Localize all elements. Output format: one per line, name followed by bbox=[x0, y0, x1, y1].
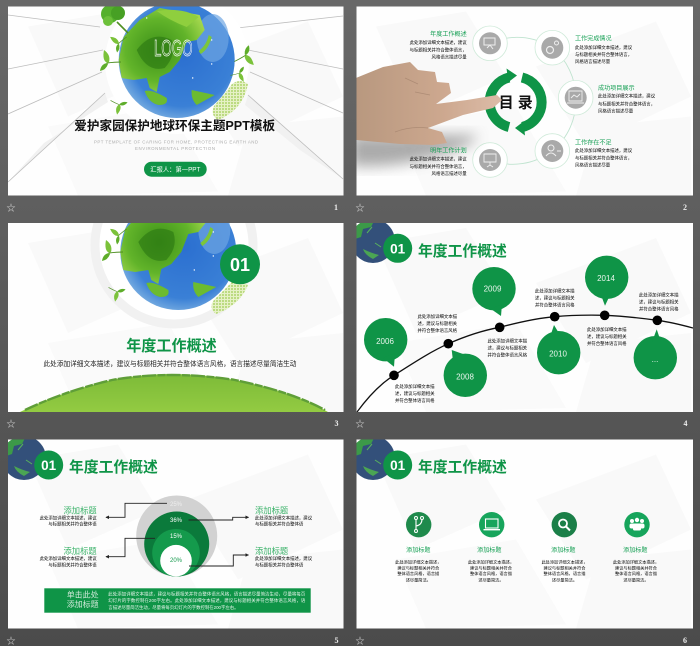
note 2014: 并符合整体语言风格 bbox=[587, 340, 627, 347]
label top right bbox=[255, 505, 313, 528]
label bottom left: 与标题相关并符合整体语 bbox=[48, 561, 97, 568]
star and number, slide 3: ☆ bbox=[6, 419, 16, 429]
item 3: 建议与标题相关并符合 bbox=[544, 564, 586, 571]
star and number, slide 3: 3 bbox=[334, 419, 338, 428]
corner earth bbox=[2, 436, 46, 480]
item 1: 述尽量简洁。 bbox=[406, 577, 431, 584]
section heading: 年度工作概述 bbox=[126, 337, 217, 355]
bubble ellipsis: ... bbox=[652, 355, 658, 364]
contents heading: 目 录 bbox=[499, 94, 533, 112]
bubble 2008 bbox=[444, 350, 487, 397]
item 2: 添加标题 bbox=[477, 546, 501, 554]
timeline dots bbox=[389, 310, 662, 380]
sprouts bbox=[102, 228, 127, 302]
label top right: 添加标题 bbox=[255, 505, 288, 515]
note 2009: 并符合整体语言风格 bbox=[488, 352, 528, 358]
icon: branch bbox=[406, 512, 431, 537]
item 2 bbox=[468, 546, 514, 584]
label: annual overview bbox=[410, 30, 467, 61]
star and number, slide 1 bbox=[6, 203, 338, 213]
note 2006: 此处添加详细文本描 bbox=[395, 383, 435, 390]
panel: slide 3 section cover bbox=[8, 223, 344, 412]
star and number, slide 5: 5 bbox=[334, 636, 338, 645]
star and number, slide 4 bbox=[355, 419, 688, 429]
section description: 此处添加详细文本描述，建议与标题相关并符合整体语言风格，语言描述尽量简洁生动 bbox=[44, 359, 297, 368]
bubble 2008: 2008 bbox=[456, 372, 474, 382]
illustration: watercolor earth bbox=[119, 2, 235, 118]
star and number, slide 3 bbox=[6, 419, 338, 429]
item 4: 此处添加详细文本描述， bbox=[613, 558, 659, 565]
label: work completion bbox=[575, 35, 633, 65]
badge: 01 bbox=[390, 242, 406, 256]
label: next year plan: 此处添加详细文本描述，建议 bbox=[410, 156, 467, 163]
slide title: 年度工作概述 bbox=[418, 242, 507, 260]
bubble 2009: 2009 bbox=[484, 284, 502, 294]
label top left: 添加标题 bbox=[63, 505, 97, 515]
badge bbox=[383, 234, 412, 263]
star and number, slide 6: 6 bbox=[683, 636, 687, 645]
note 2006: 述，建议与标题相关 bbox=[395, 390, 435, 397]
label: next year plan: 明年工作计划 bbox=[430, 147, 467, 155]
node 2 bbox=[535, 30, 570, 65]
label bottom right: 此处添加详细文本描述，建议 bbox=[255, 555, 313, 562]
label: next year plan: 风格语言描述尽量 bbox=[432, 170, 467, 177]
nested circle chart: 36% bbox=[170, 518, 183, 524]
pale green tree bbox=[213, 81, 248, 120]
note 2008 bbox=[418, 313, 458, 334]
label top right: 此处添加详细文本描述，建议 bbox=[255, 514, 313, 521]
node 1 bbox=[473, 26, 507, 61]
note 2008: 并符合整体语言风格 bbox=[418, 327, 458, 334]
timeline curve bbox=[357, 315, 693, 412]
note 2006 bbox=[395, 383, 435, 404]
grass hill bbox=[20, 374, 328, 412]
label: shortcomings: 与标题相关并符合整体语言， bbox=[575, 154, 632, 161]
item 3: 整体语言风格，语言描 bbox=[544, 570, 585, 577]
label: annual overview: 风格语言描述尽量 bbox=[432, 54, 467, 61]
pale green tree bbox=[211, 281, 248, 314]
illustration: earth bbox=[120, 223, 236, 310]
section number badge bbox=[220, 244, 260, 284]
star and number, slide 6: ☆ bbox=[355, 636, 365, 646]
green summary band: 言描述尽量简洁生动，尽量将每页幻灯片的字数控制在200字左右。 bbox=[108, 604, 239, 611]
green summary band: 添加标题 bbox=[67, 599, 99, 609]
label: next year plan bbox=[410, 147, 467, 177]
cover subtitle: ENVIRONMENTAL PROTECTION bbox=[135, 146, 215, 151]
note last bbox=[639, 292, 679, 312]
label top left bbox=[40, 505, 97, 528]
radiating lines bbox=[8, 15, 343, 182]
label bottom right: 与标题相关并符合整体语 bbox=[255, 561, 304, 568]
bubble ellipsis bbox=[634, 329, 677, 379]
label: project results: 与标题相关并符合整体语言， bbox=[598, 100, 655, 107]
cover subtitle: PPT TEMPLATE OF CARING FOR HOME, PROTECTING EARTH AND bbox=[94, 140, 258, 144]
tree bbox=[101, 5, 128, 33]
hand pointing bbox=[356, 62, 502, 145]
note 2009: 此处添加详细文本描 bbox=[488, 338, 528, 344]
item 4: 建议与标题相关并符合 bbox=[615, 564, 658, 571]
badge bbox=[34, 450, 63, 480]
note 2010: 此处添加详细文本描 bbox=[535, 288, 575, 294]
star and number, slide 2: 2 bbox=[683, 203, 687, 212]
white halo behind globe bbox=[237, 27, 240, 28]
badge: 01 bbox=[390, 458, 406, 473]
label bottom right: 添加标题 bbox=[255, 546, 288, 556]
note 2009: 述，建议与标题相关 bbox=[488, 344, 528, 352]
star and number, slide 1: 1 bbox=[334, 203, 338, 212]
star and number, slide 6 bbox=[355, 636, 687, 646]
cover subtitle bbox=[94, 140, 258, 150]
nested circle chart: 20% bbox=[170, 558, 183, 564]
star and number, slide 2 bbox=[355, 203, 687, 213]
nested circle chart bbox=[136, 496, 217, 577]
item 3 bbox=[541, 546, 588, 584]
label: work completion: 与标题相关并符合整体语言， bbox=[575, 51, 632, 58]
label: shortcomings: 此处添加详细文本描述，建议 bbox=[575, 147, 633, 154]
node 3 bbox=[558, 80, 593, 115]
label top left: 此处添加详细文本描述，建议 bbox=[40, 514, 97, 521]
item 1: 建议与标题相关并符合 bbox=[397, 564, 440, 571]
section number badge: 01 bbox=[230, 255, 250, 275]
note last: 此处添加详细文本描 bbox=[639, 292, 679, 298]
green summary band bbox=[44, 588, 311, 613]
item 4 bbox=[613, 546, 659, 584]
note 2006: 并符合整体语言风格 bbox=[395, 397, 435, 404]
bubble 2006 bbox=[364, 318, 407, 367]
label: shortcomings: 风格语言描述尽量 bbox=[575, 162, 611, 169]
label bottom right bbox=[255, 546, 313, 568]
presenter pill: 汇报人：第一PPT bbox=[150, 164, 200, 173]
LOGO: LOGO bbox=[154, 35, 192, 61]
label: project results: 成功项目展示 bbox=[598, 84, 635, 92]
connecting arc bbox=[506, 36, 574, 165]
halo ring bbox=[92, 223, 258, 328]
note last: 并符合整体语言风格 bbox=[639, 306, 679, 312]
item 3: 此处添加详细文本描述， bbox=[541, 558, 588, 565]
badge: 01 bbox=[41, 458, 57, 473]
bubble 2006: 2006 bbox=[376, 337, 394, 346]
star and number, slide 4: 4 bbox=[684, 419, 688, 428]
connector arrows bbox=[106, 503, 248, 566]
panel: slide 6 four icons bbox=[351, 436, 693, 628]
slide title: 年度工作概述 bbox=[69, 458, 158, 476]
label: shortcomings bbox=[575, 138, 633, 169]
item 4: 整体语言风格，语言描 bbox=[615, 570, 657, 577]
item 4: 添加标题 bbox=[623, 546, 647, 554]
label: work completion: 工作完成情况 bbox=[575, 35, 612, 43]
corner earth bbox=[356, 223, 394, 263]
sprouts bbox=[100, 36, 254, 114]
note last: 述，建议与标题相关 bbox=[639, 298, 679, 306]
note 2010 bbox=[535, 288, 575, 308]
note 2009 bbox=[488, 338, 528, 358]
label: project results bbox=[598, 84, 656, 115]
label: annual overview: 此处添加详细文本描述，建议 bbox=[410, 39, 467, 46]
icon: people bbox=[624, 512, 650, 537]
label bottom left bbox=[40, 546, 97, 568]
panel: slide 5 nested circles bbox=[2, 436, 344, 628]
label: annual overview: 年度工作概述 bbox=[430, 30, 467, 38]
item 1: 整体语言风格，语言描 bbox=[397, 570, 439, 577]
item 2: 整体语言风格，语言描 bbox=[470, 570, 512, 577]
label: project results: 风格语言描述尽量 bbox=[598, 108, 634, 115]
item 4: 述尽量简洁。 bbox=[623, 577, 649, 584]
icon: laptop bbox=[479, 512, 504, 537]
label: work completion: 此处添加详细文本描述，建议 bbox=[575, 44, 633, 51]
item 1 bbox=[395, 546, 441, 584]
note 2014 bbox=[587, 326, 627, 347]
star and number, slide 2: ☆ bbox=[355, 203, 365, 213]
label bottom left: 添加标题 bbox=[63, 546, 97, 556]
bubble 2010 bbox=[537, 325, 580, 374]
item 2: 述尽量简洁。 bbox=[478, 577, 504, 584]
item 1: 此处添加详细文本描述， bbox=[395, 558, 441, 565]
bubble 2010: 2010 bbox=[549, 350, 567, 358]
node 5 bbox=[473, 143, 507, 177]
item 2: 建议与标题相关并符合 bbox=[470, 564, 513, 571]
star and number, slide 1: ☆ bbox=[6, 203, 16, 213]
label top left: 与标题相关并符合整体语 bbox=[48, 521, 97, 528]
label top right: 与标题相关并符合整体语 bbox=[255, 521, 304, 528]
green cycle ring with arrows bbox=[490, 68, 542, 136]
label: annual overview: 与标题相关并符合整体语言， bbox=[410, 46, 467, 53]
item 2: 此处添加详细文本描述， bbox=[468, 558, 514, 565]
label: work completion: 风格语言描述尽量 bbox=[575, 58, 611, 65]
item 3: 述尽量简洁。 bbox=[552, 577, 577, 584]
star and number, slide 5 bbox=[6, 636, 338, 646]
star and number, slide 5: ☆ bbox=[6, 636, 16, 646]
cover title: 爱护家园保护地球环保主题PPT模板 bbox=[74, 118, 276, 133]
slide title: 年度工作概述 bbox=[418, 458, 507, 476]
hand shadow bbox=[350, 135, 478, 166]
nested circle chart: 15% bbox=[170, 534, 183, 540]
presenter pill bbox=[144, 162, 207, 177]
label: shortcomings: 工作存在不足 bbox=[575, 138, 612, 146]
label: next year plan: 与标题相关并符合整体语言， bbox=[410, 163, 467, 170]
green summary band: 单击此处 bbox=[67, 590, 99, 600]
note 2008: 此处添加详细文本描 bbox=[418, 313, 458, 320]
panel: slide 2 contents bbox=[350, 6, 693, 196]
nested circle chart: 25% bbox=[170, 502, 183, 508]
label bottom left: 此处添加详细文本描述，建议 bbox=[40, 555, 97, 562]
bubble 2009 bbox=[472, 267, 516, 316]
bubble 2014 bbox=[585, 256, 628, 306]
item 3: 添加标题 bbox=[551, 546, 575, 554]
badge bbox=[383, 450, 412, 480]
icon: magnifier bbox=[552, 512, 577, 537]
note 2010: 述，建议与标题相关 bbox=[535, 294, 575, 302]
green summary band: 此处添加详细文本描述，建议与标题相关并符合整体语言风格，语言描述尽量简洁生动，尽量将每页 bbox=[108, 590, 306, 597]
note 2014: 此处添加详细文本描 bbox=[587, 326, 627, 333]
node 4 bbox=[535, 134, 570, 168]
note 2008: 述，建议与标题相关 bbox=[418, 320, 458, 327]
green summary band: 幻灯片的字数控制在200字左右。此处添加详细文本描述，建议与标题相关并符合整体语言风格，语 bbox=[108, 597, 306, 604]
label: project results: 此处添加详细文本描述，建议 bbox=[598, 93, 656, 100]
note 2014: 述，建议与标题相关 bbox=[587, 333, 627, 340]
bubble 2014: 2014 bbox=[597, 274, 615, 283]
corner earth bbox=[351, 436, 395, 480]
item 1: 添加标题 bbox=[406, 546, 430, 554]
panel: slide 1 cover bbox=[8, 0, 344, 196]
panel: slide 4 timeline bbox=[351, 219, 693, 412]
note 2010: 并符合整体语言风格 bbox=[535, 302, 575, 308]
star and number, slide 4: ☆ bbox=[355, 419, 365, 429]
